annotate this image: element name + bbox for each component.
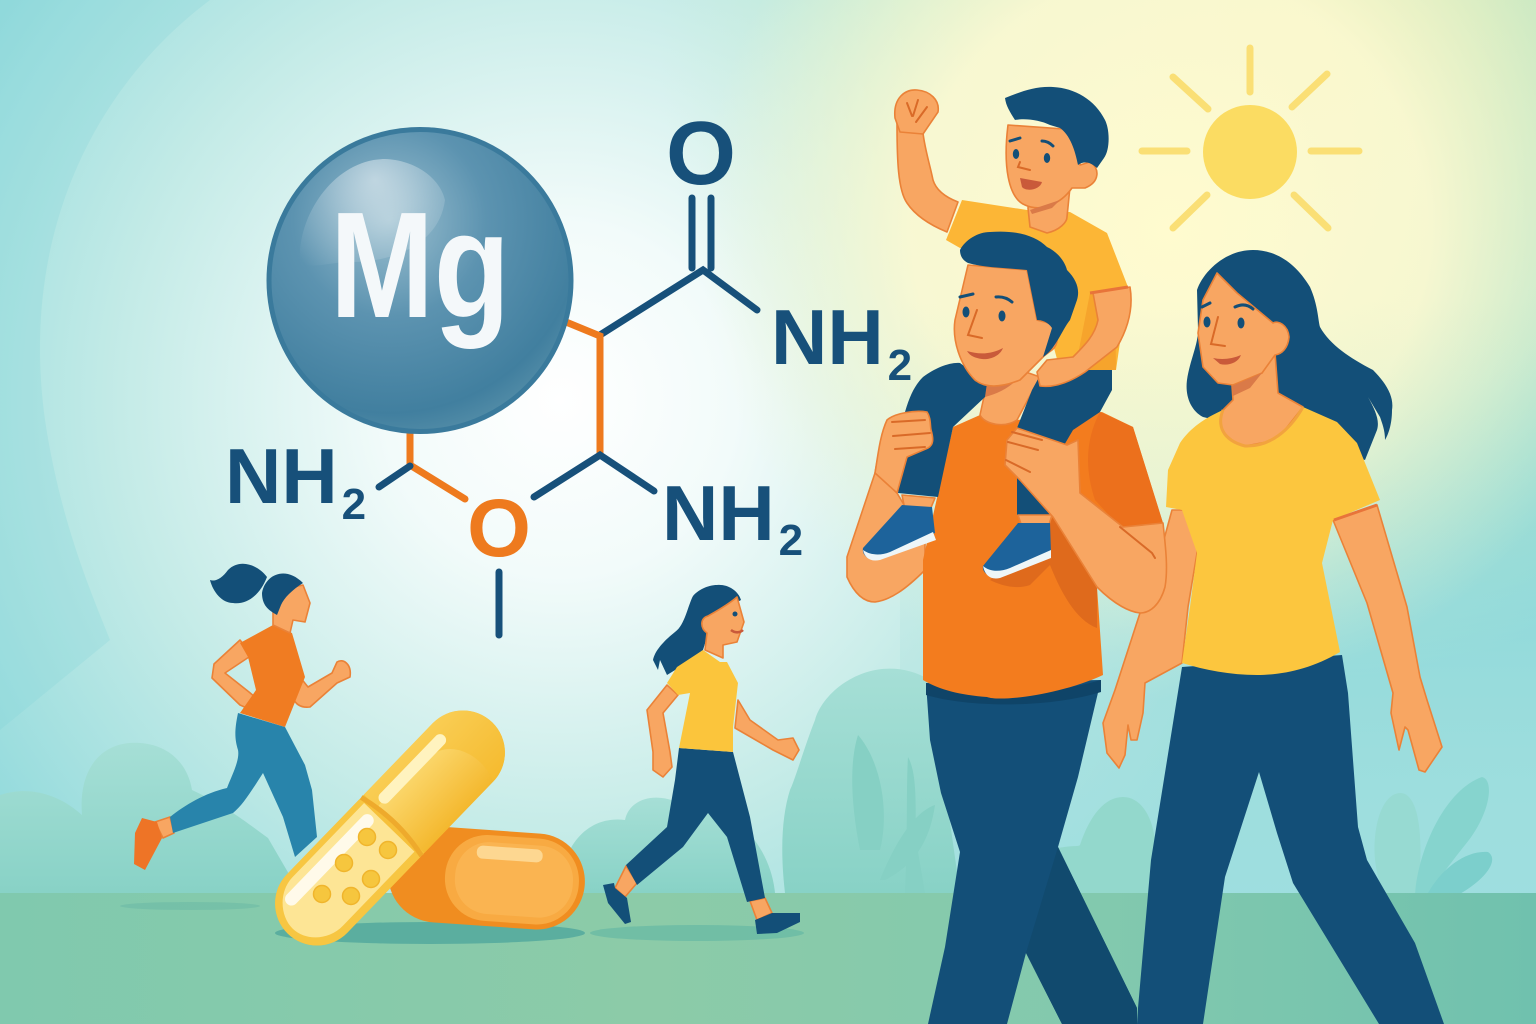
girl shoes — [603, 883, 800, 934]
child socks and right shoe — [983, 515, 1052, 578]
capsules — [258, 693, 588, 963]
runner ponytail — [210, 564, 267, 603]
woman face — [1198, 273, 1289, 385]
girl face — [702, 597, 744, 658]
molecule labels — [225, 104, 912, 574]
runner pants — [170, 713, 317, 857]
girl shadow — [590, 925, 804, 941]
child face — [1006, 125, 1097, 208]
man pants — [926, 680, 1137, 1024]
woman right arm — [1333, 505, 1442, 772]
label: NH2 left: 2 — [342, 480, 366, 529]
ground — [0, 893, 1536, 1024]
bond: lower left orange — [410, 432, 465, 499]
label: O orange: O — [467, 483, 531, 574]
label: NH2 bottom: NH — [662, 469, 775, 557]
girl ankle front — [750, 898, 772, 920]
runner shirt — [240, 625, 305, 727]
label: NH2 left: NH — [225, 432, 338, 520]
runner shadow — [120, 902, 260, 910]
runner hair — [262, 574, 303, 615]
runner front arm — [293, 661, 350, 707]
bond: upper right chain — [600, 270, 757, 335]
woman shirt — [1166, 407, 1380, 675]
woman neck — [1218, 353, 1303, 447]
girl ankle back — [615, 866, 637, 897]
girl hair — [653, 585, 741, 675]
child left leg — [898, 363, 987, 497]
woman pants — [1137, 655, 1444, 1024]
man waist shadow — [926, 680, 1101, 704]
runner back arm — [212, 640, 264, 712]
magnesium atom: Mg — [330, 180, 510, 349]
bond: lower left blue — [379, 466, 410, 487]
magnesium atom — [269, 130, 571, 432]
label: NH2 right: NH — [771, 293, 884, 381]
child raised arm — [897, 123, 958, 232]
child lower arm and hand — [1037, 287, 1131, 386]
man shirt — [923, 412, 1163, 699]
sun — [1142, 48, 1359, 228]
bond: orange link to Mg — [566, 322, 600, 455]
woman — [1103, 250, 1444, 1024]
man left forearm — [847, 445, 925, 602]
label: O top: O — [666, 104, 736, 204]
child socks and left shoe — [863, 495, 936, 561]
child shirt — [946, 200, 1128, 370]
child hair — [1005, 87, 1109, 168]
runner foot — [155, 817, 174, 838]
runner — [120, 564, 350, 910]
man neck — [980, 370, 1040, 425]
capsule: orange — [385, 823, 588, 933]
girl front arm — [735, 700, 799, 760]
man left hand — [875, 411, 933, 493]
molecule bonds — [379, 198, 757, 635]
child right leg — [1017, 370, 1112, 447]
girl shirt — [667, 650, 738, 752]
man and child — [847, 87, 1166, 1024]
walking girl — [590, 585, 804, 941]
capsule dots — [314, 828, 396, 904]
woman hair — [1187, 250, 1392, 460]
background bushes — [0, 669, 1492, 895]
child neck — [1028, 187, 1070, 233]
man face — [954, 265, 1057, 386]
bond: carbonyl double bond — [692, 198, 711, 268]
runner neck and face — [273, 585, 310, 633]
child fist — [895, 90, 938, 134]
capsule shadow — [275, 922, 585, 944]
bond: lower right — [534, 455, 654, 497]
bond: below oxygen — [496, 572, 502, 635]
woman left arm — [1103, 510, 1197, 768]
man hair — [960, 232, 1078, 357]
girl pants — [626, 748, 765, 902]
capsule: yellow — [258, 693, 522, 963]
label: NH2 bottom: 2 — [779, 516, 803, 565]
man right arm — [1005, 428, 1166, 613]
girl back arm — [647, 685, 678, 777]
label: NH2 right: 2 — [888, 341, 912, 390]
